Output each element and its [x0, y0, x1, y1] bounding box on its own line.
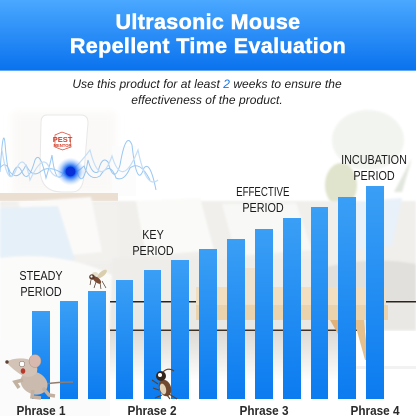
icon: mosquito [89, 270, 107, 289]
icon: running cockroach [152, 368, 178, 400]
label: incubation period: PERIOD [353, 168, 394, 183]
blue indicator light [56, 158, 84, 186]
label: steady period: PERIOD [20, 284, 61, 299]
subtitle: Use this product for at least 2 weeks to ensure the [72, 77, 342, 91]
coffee table [196, 287, 386, 305]
icon: ultrasonic repeller device [0, 114, 158, 192]
wall decor [12, 112, 116, 194]
title [70, 10, 346, 58]
label: effective period: EFFECTIVE [236, 184, 290, 199]
sofa [0, 197, 416, 350]
subtitle: effectiveness of the product. [131, 93, 283, 107]
icon: ultrasonic repeller device: MENTOR [53, 143, 72, 148]
sound waves [0, 138, 156, 190]
label: effective period [236, 184, 290, 215]
title: Repellent Time Evaluation [70, 34, 346, 58]
bar chart [32, 186, 384, 399]
icon: running mouse [5, 354, 73, 400]
label: steady period: STEADY [19, 268, 62, 283]
label: steady period [19, 268, 62, 299]
label: key period [132, 227, 174, 258]
plant [325, 110, 412, 207]
label: incubation period: INCUBATION [341, 152, 406, 167]
label: effective period: PERIOD [242, 200, 284, 215]
header banner [0, 0, 416, 71]
logo [55, 132, 71, 150]
title: Ultrasonic Mouse [116, 10, 300, 34]
shelf [0, 193, 118, 201]
label: key period: KEY [142, 227, 163, 242]
floor [110, 331, 416, 416]
subtitle [72, 77, 342, 107]
icon: ultrasonic repeller device: PEST [53, 135, 73, 144]
label: incubation period [341, 152, 406, 183]
device body [40, 115, 88, 192]
label: key period: PERIOD [132, 243, 173, 258]
